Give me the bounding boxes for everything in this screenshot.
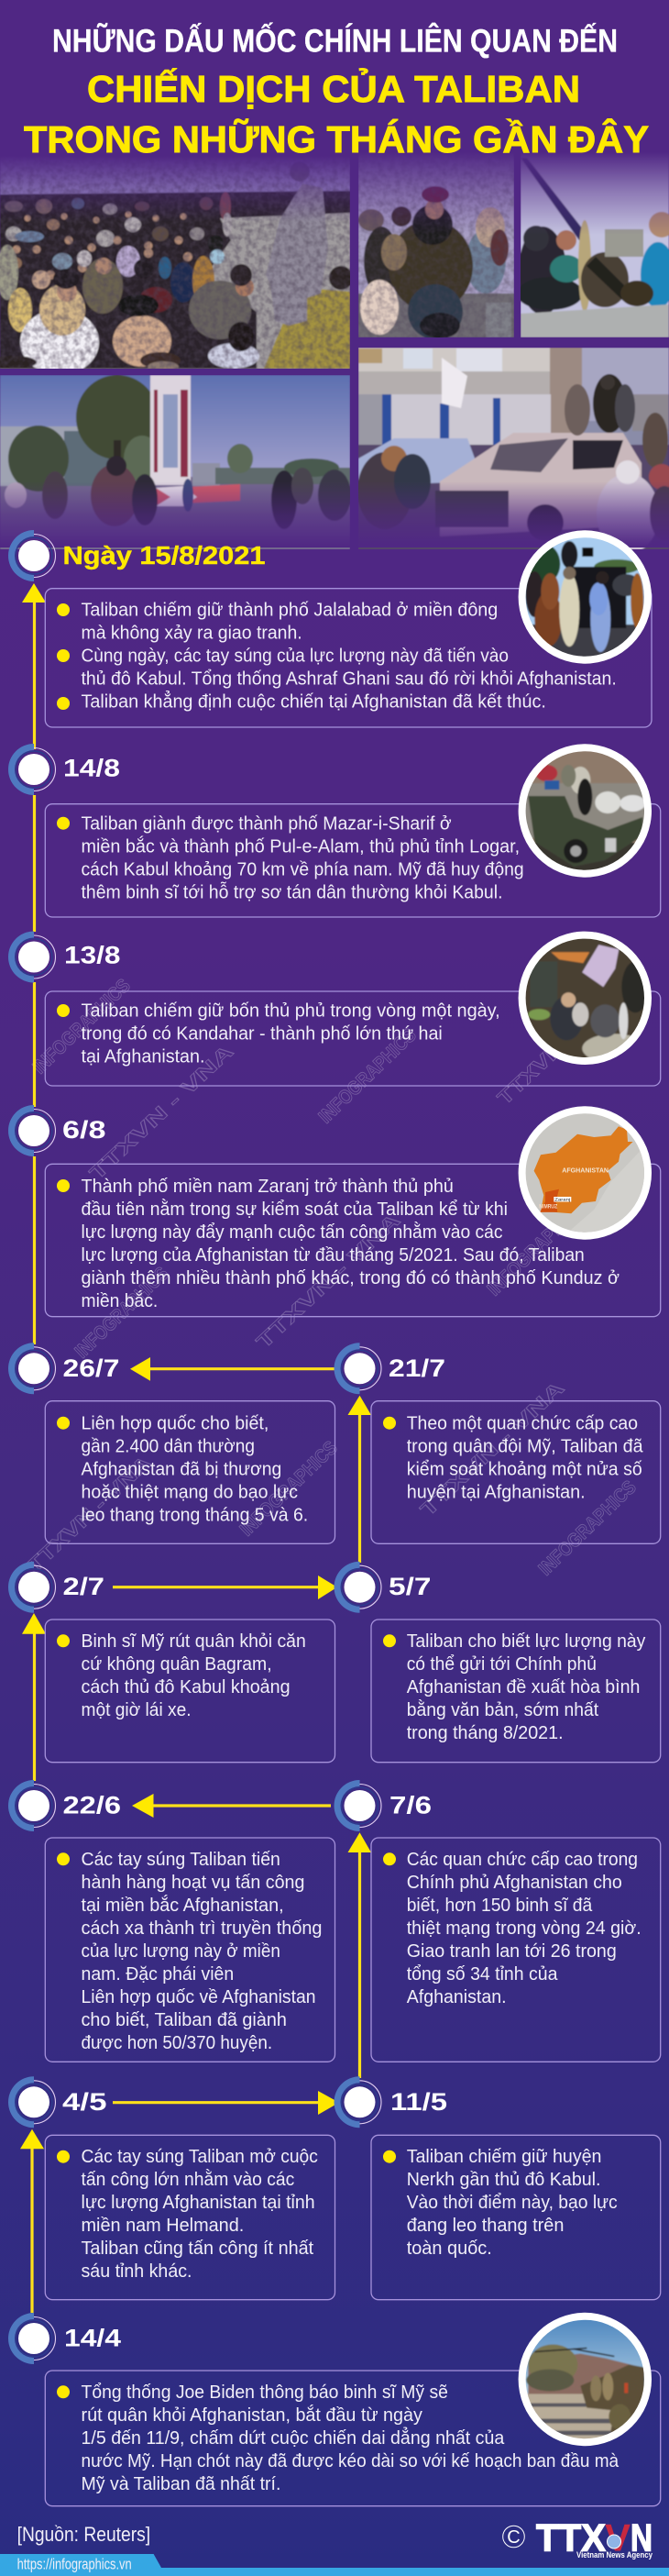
map: Afghanistan and Nimruz: Zaranj [554, 1198, 570, 1201]
panel: 7/6 [334, 1780, 661, 2062]
logo: TTXVN [536, 2516, 653, 2560]
panel: 4/5: Taliban cũng tấn công ít nhất [81, 2238, 313, 2259]
panel: 26/7: leo thang trong tháng 5 và 6. [81, 1504, 308, 1525]
arrow: right to 5/7 [318, 1575, 337, 1599]
panel: 4/5: miền nam Helmand. [81, 2215, 244, 2236]
photo circle: Kandahar street scene [519, 932, 652, 1065]
panel: 21/7: trong quân đội Mỹ, Taliban đã [407, 1435, 643, 1456]
panel: 22/6: nam. Đặc phái viên [81, 1963, 234, 1985]
panel: 14/4: 14/4 [64, 2324, 121, 2351]
panel: 6/8: đầu tiên nằm trong sự kiểm soát của Taliban kể từ khi [81, 1199, 508, 1220]
photo circle: camouflage pickup [519, 744, 652, 878]
website url: https://infographics.vn [17, 2557, 132, 2573]
panel: 14/8: Taliban giành được thành phố Mazar-i-Sharif ở [81, 813, 452, 834]
panel: 2/7 [8, 1562, 335, 1763]
arrow: up to 15/8 [22, 583, 46, 603]
panel: 6/8: miền bắc. [81, 1290, 158, 1311]
panel: 11/5: đang leo thang trên [407, 2215, 565, 2236]
watermarks: INFOGRAPHICS [71, 1263, 172, 1363]
arrow: left to 26/7 [130, 1357, 150, 1381]
panel: 15/8/2021 [8, 530, 652, 727]
title: TRONG NHỮNG THÁNG GẦN ĐÂY [24, 118, 649, 160]
photo: Taliban fighter close-up [358, 152, 514, 339]
watermarks: TTXVN - VNA [417, 1377, 568, 1521]
map: Afghanistan and Nimruz: AFGHANISTAN [562, 1166, 609, 1174]
arrow: up to 4/5 [20, 2129, 44, 2149]
panel: 14/4: rút quân khỏi Afghanistan, bắt đầu từ ngày [81, 2405, 423, 2426]
panel: 6/8: giành thêm nhiều thành phố khác, trong đó có thành phố Kunduz ở [81, 1267, 620, 1288]
title: CHIẾN DỊCH CỦA TALIBAN [87, 68, 580, 110]
panel: 14/8: cách Kabul khoảng 70 km về phía nam. Mỹ đã huy động [81, 858, 524, 879]
panel: 11/5: toàn quốc. [407, 2238, 492, 2259]
panel: 26/7: hoặc thiệt mạng do bạo lực [81, 1481, 298, 1502]
watermarks: INFOGRAPHICS [236, 1437, 342, 1541]
watermarks: INFOGRAPHICS [28, 975, 135, 1078]
panel: 26/7: Liên hợp quốc cho biết, [81, 1412, 269, 1433]
panel: 14/8: thêm binh sĩ tới hỗ trợ sơ tán dân thường khỏi Kabul. [81, 881, 502, 902]
panel: 4/5: tấn công lớn nhằm vào các [81, 2169, 294, 2190]
panel: 26/7: gần 2.400 dân thường [81, 1435, 255, 1456]
panel: 7/6: Các quan chức cấp cao trong [407, 1849, 638, 1870]
panel: 7/6: Afghanistan. [407, 1986, 507, 2007]
panel: 7/6: thiệt mạng trong vòng 24 giờ. [407, 1918, 642, 1939]
panel: 7/6: biết, hơn 150 binh sĩ đã [407, 1895, 593, 1916]
arrow: up to 21/7 [348, 1396, 371, 1415]
source note: [Nguồn: Reuters] [17, 2523, 150, 2546]
photo: fighters with machine gun on truck [517, 152, 669, 337]
panel: 7/6: tổng số 34 tỉnh của [407, 1963, 558, 1985]
logo: TTXVN: TTX [536, 2516, 606, 2559]
panel: 5/7 [334, 1562, 661, 1763]
panel: 21/7: kiểm soát khoảng một nửa số [407, 1458, 642, 1479]
panel: 22/6 [8, 1780, 335, 2062]
copyright symbol [503, 2526, 524, 2548]
panel: 7/6: Chính phủ Afghanistan cho [407, 1872, 622, 1893]
panel: 26/7 [8, 1343, 335, 1543]
panel: 6/8: lực lượng của Afghanistan từ đầu tháng 5/2021. Sau đó, Taliban [81, 1244, 585, 1266]
panel: 5/7: bằng văn bản, sớm nhất [407, 1699, 598, 1720]
watermarks: TTXVN - VNA [24, 1452, 155, 1577]
logo: TTXVN: Vietnam News Agency [576, 2550, 653, 2560]
panel: 21/7: 21/7 [389, 1354, 445, 1382]
arrow: up to 7/6 [348, 1832, 371, 1852]
arrow: up to 2/7 [22, 1613, 46, 1634]
panel: 11/5: Vào thời điểm này, bạo lực [407, 2192, 618, 2213]
footer band [0, 2554, 669, 2576]
logo: TTXVN: N [631, 2516, 653, 2559]
panel: 15/8/2021: mà không xảy ra giao tranh. [81, 623, 302, 644]
panel: 15/8/2021: thủ đô Kabul. Tổng thống Ashraf Ghani sau đó rời khỏi Afghanistan. [81, 669, 617, 690]
photo circle: fighters by vehicle [519, 530, 652, 664]
timeline connectors [32, 601, 359, 2313]
panel: 22/6: tại miền bắc Afghanistan, [81, 1895, 284, 1916]
panel: 22/6: cách xa thành trì truyền thống [81, 1918, 323, 1939]
panel: 21/7: huyện tại Afghanistan. [407, 1481, 586, 1502]
watermarks: INFOGRAPHICS [483, 1197, 589, 1300]
panel: 4/5: sáu tỉnh khác. [81, 2261, 192, 2282]
watermarks: TTXVN - VNA [86, 1041, 237, 1185]
panel: 22/6: cho biết, Taliban đã giành [81, 2009, 287, 2030]
panel: 14/8: 14/8 [63, 755, 120, 782]
watermarks: INFOGRAPHICS [534, 1476, 641, 1580]
panel: 2/7: cứ không quân Bagram, [81, 1653, 272, 1675]
panel: 14/8: miền bắc và thành phố Pul-e-Alam, thủ phủ tỉnh Logar, [81, 835, 520, 857]
panel: 21/7: Theo một quan chức cấp cao [407, 1412, 638, 1433]
panel: 11/5: Taliban chiếm giữ huyện [407, 2146, 601, 2167]
panel: 2/7: 2/7 [62, 1573, 104, 1600]
panel: 22/6: được hơn 50/370 huyện. [81, 2032, 272, 2053]
watermarks: TTXVN - VNA [253, 1210, 404, 1354]
panel: 5/7: 5/7 [389, 1573, 431, 1600]
panel: 26/7: 26/7 [62, 1354, 119, 1382]
panel: 2/7: cách thủ đô Kabul khoảng [81, 1676, 291, 1697]
panel: 5/7: Afghanistan đề xuất hòa bình [407, 1676, 640, 1697]
panel: 13/8: 13/8 [64, 942, 121, 969]
panel: 5/7: trong tháng 8/2021. [407, 1722, 564, 1743]
panel: 6/8 [8, 1105, 661, 1317]
photo: city square with clock tower [0, 375, 351, 550]
panel: 13/8: Taliban chiếm giữ bốn thủ phủ trong vòng một ngày, [81, 1000, 500, 1021]
panel: 15/8/2021: Ngày 15/8/2021 [62, 541, 266, 569]
panel: 15/8/2021: Taliban chiếm giữ thành phố Jalalabad ở miền đông [81, 600, 498, 621]
photo: crowd at airport [0, 156, 353, 375]
watermarks: TTXVN [494, 1037, 568, 1110]
panel: 22/6: Các tay súng Taliban tiến [81, 1849, 280, 1870]
panel: 6/8: lực lượng này đẩy mạnh cuộc tấn công nhằm vào các [81, 1222, 502, 1243]
panel: 15/8/2021: Cùng ngày, các tay súng của lực lượng này đã tiến vào [81, 646, 509, 667]
panel: 4/5 [8, 2076, 335, 2300]
panel: 5/7: có thể gửi tới Chính phủ [407, 1653, 597, 1675]
panel: 22/6: 22/6 [62, 1792, 121, 1819]
map: Afghanistan and Nimruz: NIMRUZ [539, 1205, 558, 1211]
panel: 11/5: Nerkh gần thủ đô Kabul. [407, 2169, 601, 2190]
panel: 14/4: 1/5 đến 11/9, chấm dứt cuộc chiến dai dẳng nhất của [81, 2427, 505, 2449]
panel: 14/4 [8, 2313, 661, 2506]
panel: 13/8: tại Afghanistan. [81, 1045, 205, 1067]
panel: 4/5: Các tay súng Taliban mở cuộc [81, 2146, 318, 2167]
panel: 14/8 [8, 744, 661, 917]
photo circle: US troops boarding helicopter [519, 2313, 652, 2446]
panel: 7/6: 7/6 [389, 1792, 432, 1819]
panel: 13/8 [8, 932, 661, 1086]
panel: 11/5: 11/5 [390, 2088, 447, 2116]
panel: 26/7: Afghanistan đã bị thương [81, 1458, 281, 1479]
panel: 22/6: Liên hợp quốc về Afghanistan [81, 1986, 315, 2007]
panel: 11/5 [334, 2076, 661, 2300]
panel: 15/8/2021: Taliban khẳng định cuộc chiến tại Afghanistan đã kết thúc. [81, 691, 546, 713]
panel: 13/8: trong đó có Kandahar - thành phố lớn thứ hai [81, 1023, 443, 1044]
photo: fighters on pickup truck [357, 348, 669, 554]
map: Afghanistan and Nimruz [519, 1106, 652, 1240]
logo: TTXVN: V [605, 2516, 631, 2559]
panel: 14/4: Mỹ và Taliban đã nhất trí. [81, 2473, 280, 2494]
title [24, 23, 649, 160]
arrow: right to 11/5 [318, 2091, 339, 2115]
panel: 5/7: Taliban cho biết lực lượng này [407, 1631, 646, 1652]
arrow: left to 22/6 [132, 1794, 154, 1818]
panel: 6/8: Thành phố miền nam Zaranj trở thành thủ phủ [81, 1176, 454, 1197]
panel: 2/7: Binh sĩ Mỹ rút quân khỏi căn [81, 1631, 306, 1652]
panel: 14/4: Tổng thống Joe Biden thông báo binh sĩ Mỹ sẽ [81, 2382, 448, 2403]
panel: 4/5: 4/5 [62, 2088, 106, 2116]
panel: 22/6: hành hàng hoạt vụ tấn công [81, 1872, 304, 1893]
panel: 2/7: một giờ lái xe. [81, 1699, 192, 1720]
panel: 22/6: của lực lượng này ở miền [81, 1940, 280, 1962]
panel: 21/7 [334, 1343, 661, 1543]
panel: 14/4: nước Mỹ. Hạn chót này đã được kéo dài so với kế hoạch ban đầu mà [81, 2450, 620, 2471]
panel: 4/5: lực lượng Afghanistan tại tỉnh [81, 2192, 315, 2213]
copyright symbol: C [507, 2527, 521, 2548]
watermarks: INFOGRAPHICS [314, 1024, 421, 1128]
panel: 7/6: Giao tranh lan tới 26 trong [407, 1940, 617, 1962]
watermarks [24, 975, 641, 1580]
panel: 6/8: 6/8 [62, 1116, 106, 1144]
